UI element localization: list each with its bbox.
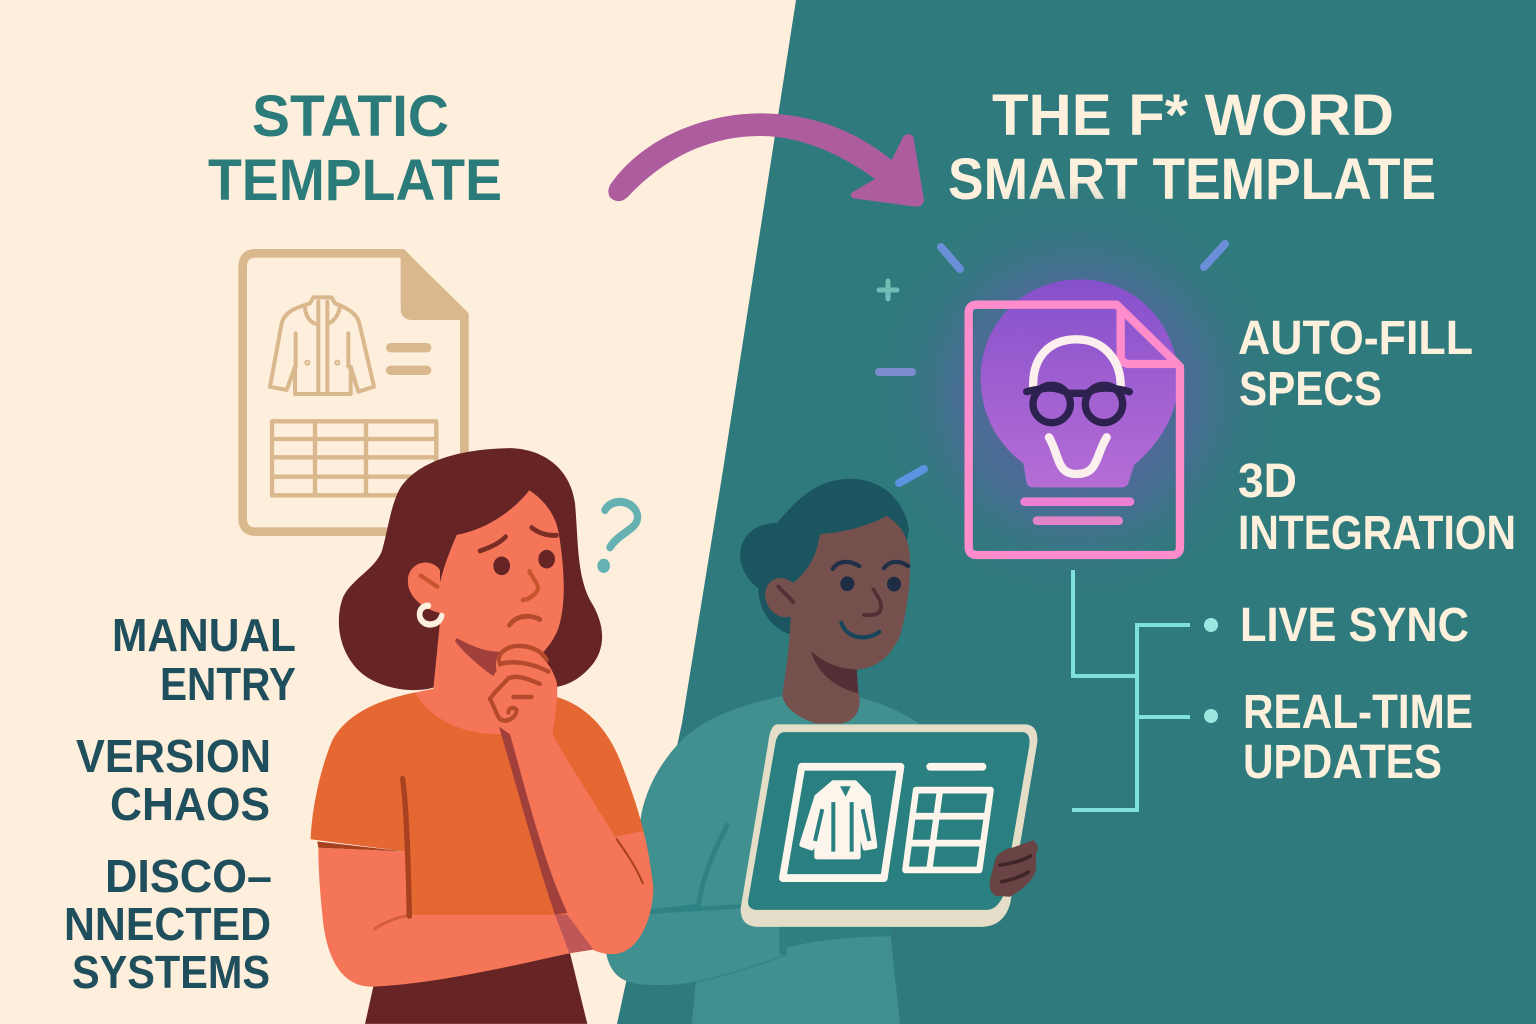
- icon: outline jacket: [270, 297, 374, 394]
- sparks around bulb: [879, 244, 1225, 483]
- list: static problems: DISCO–: [105, 850, 272, 902]
- woman ear: [408, 563, 440, 613]
- woman face details: [480, 528, 557, 625]
- man face details: [778, 562, 908, 637]
- woman neck shadow: [455, 638, 500, 678]
- man hair: [740, 479, 909, 634]
- list: smart features: REAL-TIME: [1243, 686, 1473, 739]
- woman skirt: [365, 953, 587, 1024]
- list: smart features: 3D: [1238, 455, 1297, 508]
- icon: question mark: [597, 502, 638, 573]
- glow behind smart document: [863, 180, 1293, 610]
- heading: static template: [208, 84, 502, 213]
- woman neck and face: [415, 490, 564, 734]
- list: smart features: SPECS: [1239, 363, 1382, 416]
- woman hair: [339, 448, 602, 690]
- icon: document outline: [969, 305, 1180, 555]
- icon: static document: [243, 252, 465, 532]
- list: static problems: SYSTEMS: [72, 946, 270, 998]
- list: smart features: AUTO-FILL: [1238, 312, 1473, 365]
- woman shirt: [311, 692, 643, 920]
- list: smart features: LIVE SYNC: [1240, 599, 1469, 652]
- tablet table icon: [905, 790, 991, 870]
- connector lines: [1072, 570, 1218, 810]
- heading: the f* word smart template: SMART TEMPLATE: [948, 147, 1436, 212]
- woman earring: [420, 606, 442, 624]
- heading: static template: TEMPLATE: [208, 148, 502, 213]
- man face and neck: [765, 516, 910, 724]
- heading: the f* word smart template: THE F* WORD: [992, 83, 1394, 148]
- icon: glasses: [1027, 385, 1129, 423]
- tablet jacket frame: [783, 767, 991, 878]
- list: static problems: VERSION: [76, 730, 271, 782]
- list: static problems: CHAOS: [110, 778, 270, 830]
- woman forearm and hand: [489, 645, 653, 954]
- man neck shadow: [811, 651, 858, 693]
- icon: smart document with bulb: [969, 279, 1180, 555]
- tablet jacket icon: [802, 783, 875, 857]
- tablet: [741, 724, 1037, 927]
- list: static problems: MANUAL: [112, 609, 296, 661]
- list: static problems: ENTRY: [160, 658, 296, 710]
- woman fingers: [490, 646, 548, 720]
- heading: the f* word smart template: [948, 83, 1436, 212]
- right panel: smart background: [617, 0, 1536, 1024]
- icon: purple bulb: [981, 279, 1178, 487]
- figure: man with tablet: [605, 479, 1038, 1024]
- figure: confused woman: [311, 448, 653, 1024]
- list: static problems: [64, 609, 296, 998]
- woman arm shadow: [499, 727, 567, 915]
- man hand: [990, 840, 1038, 897]
- icon: bulb base lines: [1025, 502, 1130, 521]
- icon: spec table: [272, 421, 436, 495]
- man shirt: [605, 696, 920, 1024]
- icon: filament: [1033, 339, 1121, 388]
- list: smart features: [1238, 312, 1516, 789]
- list: smart features: UPDATES: [1243, 736, 1442, 789]
- heading: static template: STATIC: [252, 84, 449, 149]
- arrow: static to smart: [608, 113, 924, 207]
- list: static problems: NNECTED: [64, 898, 271, 950]
- woman folded arm: [318, 848, 593, 987]
